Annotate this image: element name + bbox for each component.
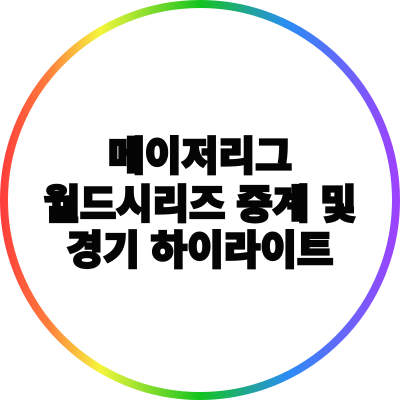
- title: 메이저리그: [108, 135, 292, 179]
- title: 경기 하이라이트: [66, 229, 334, 273]
- title: [44, 135, 356, 273]
- title: 월드시리즈 중계 및: [44, 183, 356, 227]
